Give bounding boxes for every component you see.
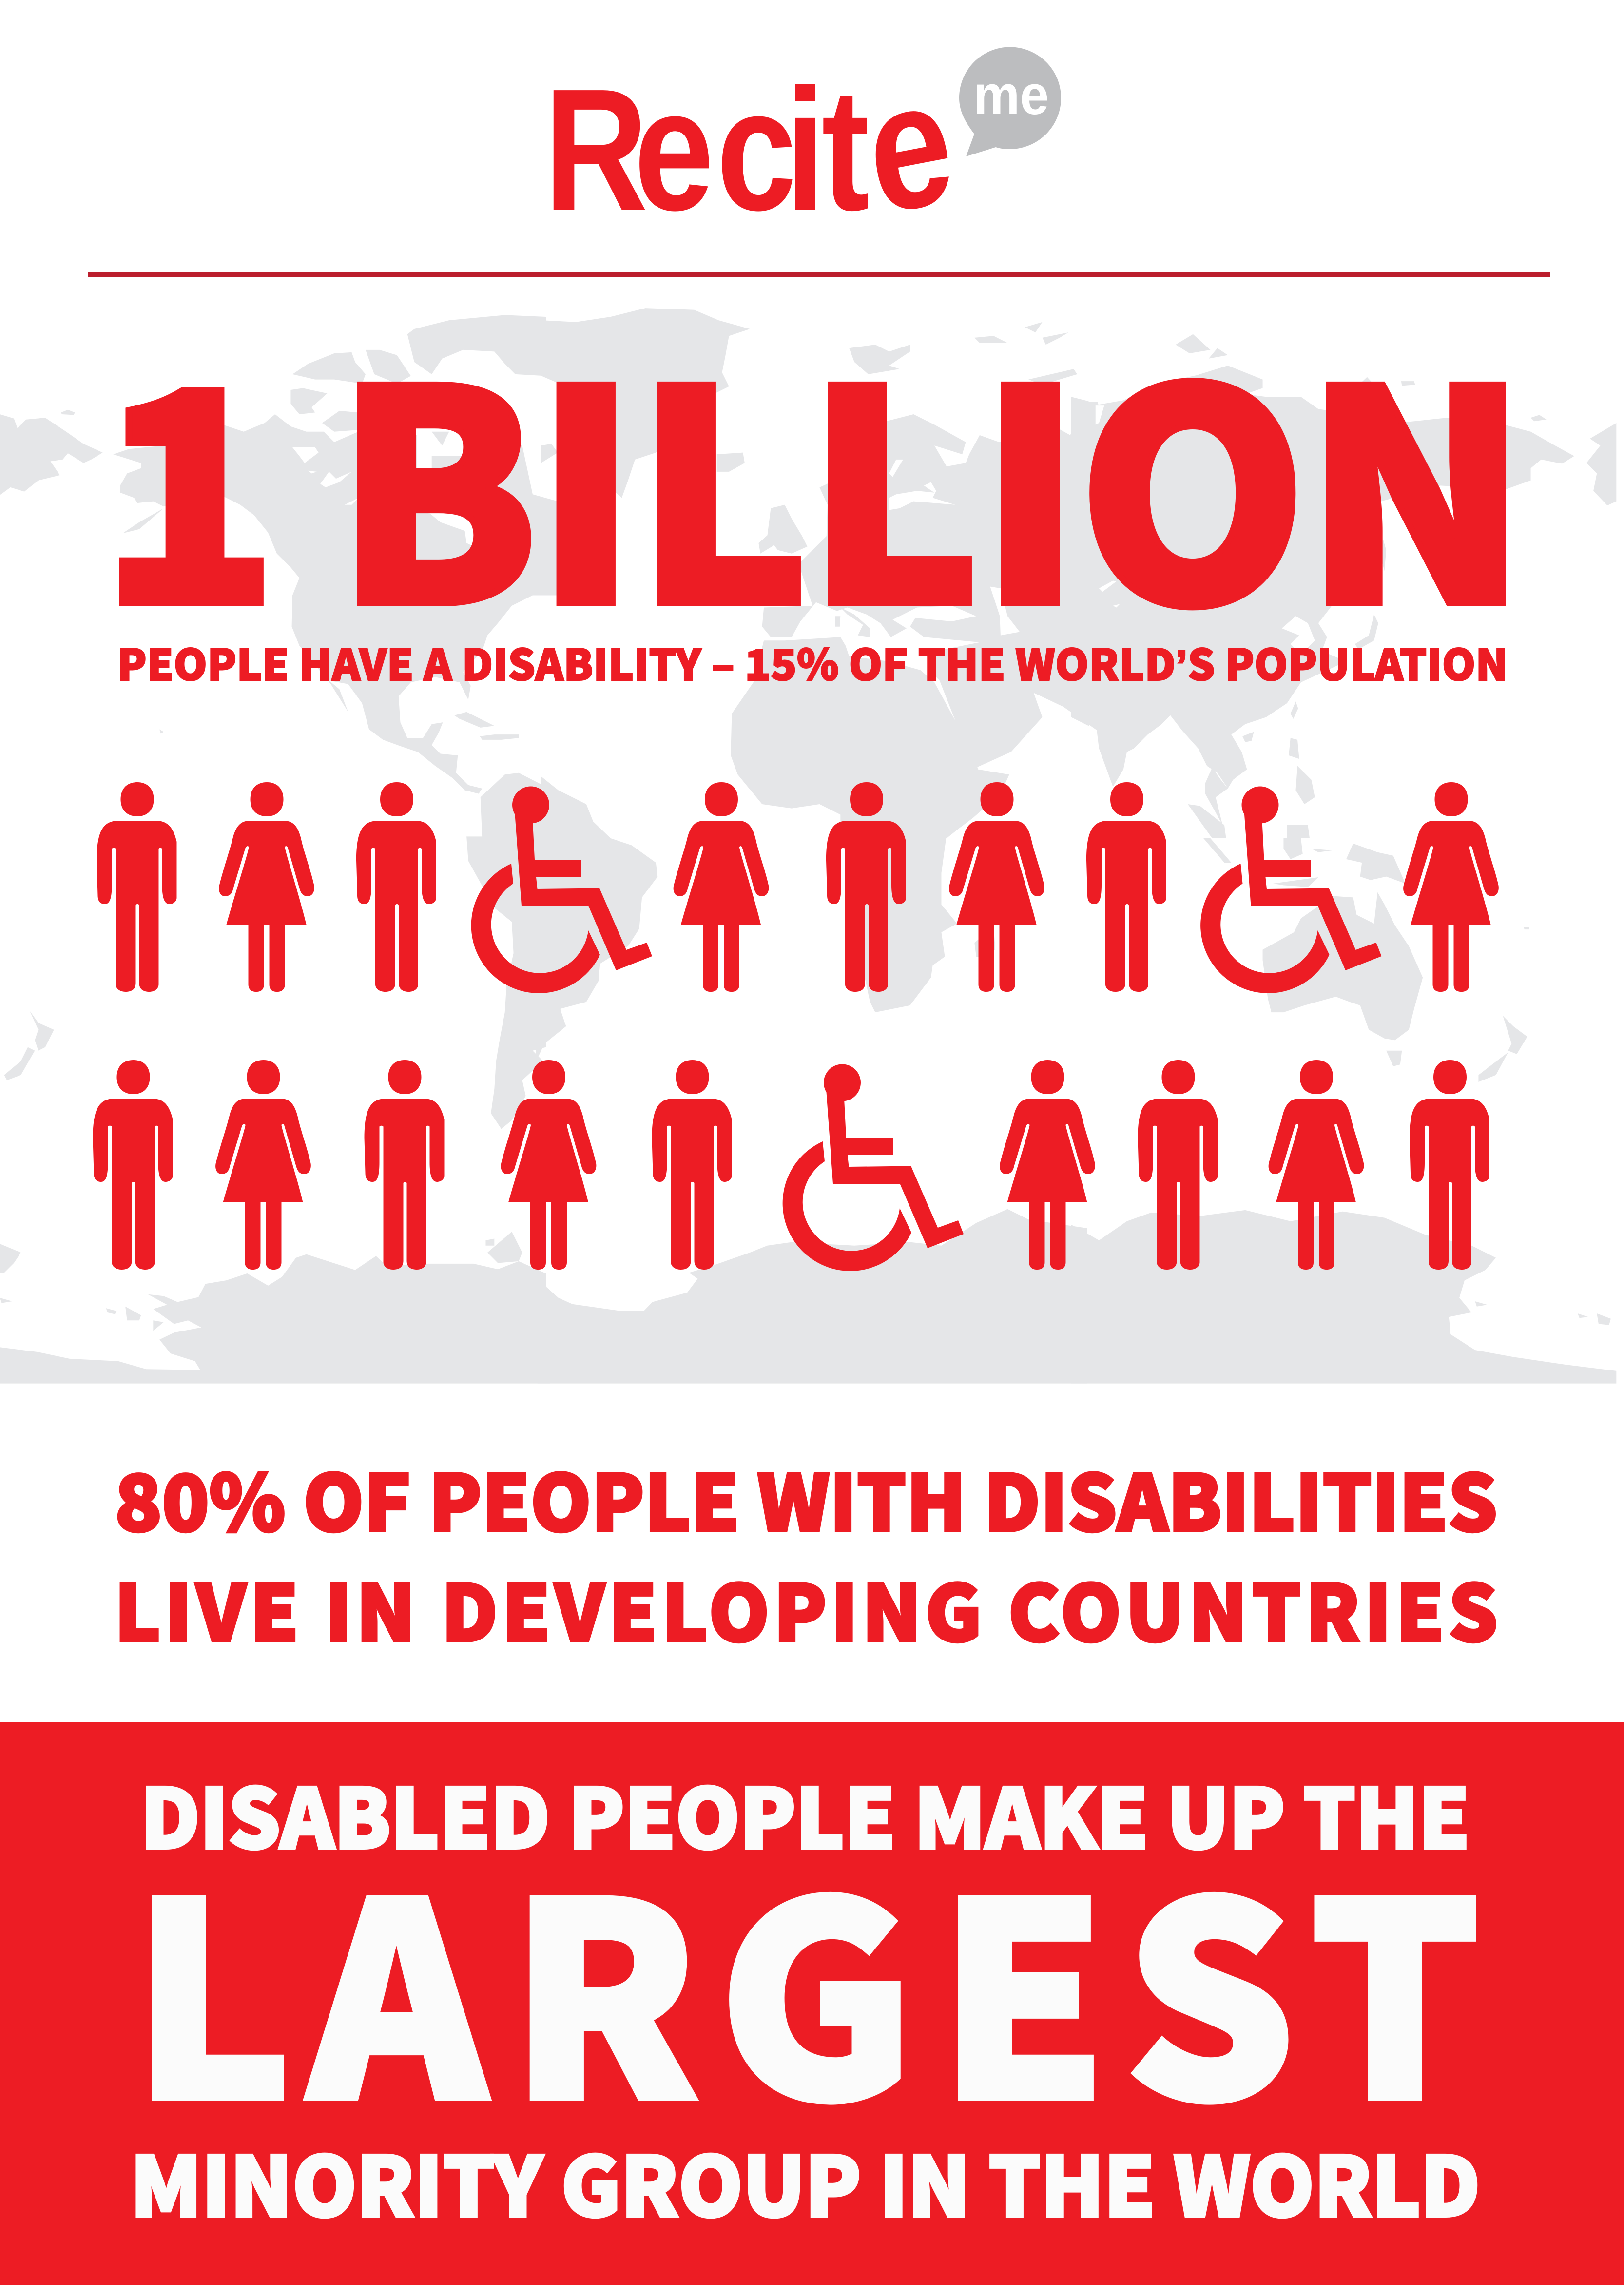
icon: woman xyxy=(219,782,314,992)
red band xyxy=(0,1722,1624,2285)
header rule xyxy=(88,272,1550,277)
speech bubble xyxy=(959,47,1061,156)
statistic line 1: 80% OF PEOPLE WITH DISABILITIES xyxy=(115,1442,1497,1553)
icon: woman xyxy=(1000,1060,1095,1270)
logo: Recite me xyxy=(544,40,1061,252)
map: north-east xyxy=(1071,334,1616,838)
icon: man xyxy=(365,1060,445,1270)
statistic line 2: LIVE IN DEVELOPING COUNTRIES xyxy=(115,1552,1498,1663)
icon: wheelchair xyxy=(1200,787,1381,993)
pictogram row 1 xyxy=(97,782,1499,993)
map: north-west xyxy=(0,315,558,838)
logo wordmark: e xyxy=(856,40,963,252)
band line 1: DISABLED PEOPLE MAKE UP THE xyxy=(140,1754,1470,1872)
icon: woman xyxy=(501,1060,596,1270)
band headline: LARGEST: LARGEST xyxy=(132,1788,1481,2176)
icon: man xyxy=(356,782,436,992)
map: south-centre xyxy=(536,835,1087,1384)
band line 3: MINORITY GROUP IN THE WORLD xyxy=(130,2122,1480,2240)
icon: man xyxy=(826,782,906,992)
icon: man xyxy=(652,1060,732,1270)
panel: largest minority xyxy=(0,1722,1624,2285)
subheading: PEOPLE HAVE A DISABILITY – 15% OF THE WORLD’S POPULATION xyxy=(117,632,1508,693)
icon: woman xyxy=(1269,1060,1364,1270)
icon: man xyxy=(1086,782,1166,992)
icon: wheelchair xyxy=(783,1064,964,1271)
icon: woman xyxy=(215,1060,311,1270)
icon: woman xyxy=(1403,782,1499,992)
statistic: developing countries xyxy=(115,1442,1498,1663)
logo wordmark: Recit xyxy=(544,53,870,247)
pictogram row 2 xyxy=(93,1060,1489,1271)
icon: man xyxy=(1138,1060,1218,1270)
icon: man xyxy=(97,782,176,992)
bubble text: me: me xyxy=(973,64,1049,126)
icon: man xyxy=(1410,1060,1489,1270)
icon: man xyxy=(93,1060,173,1270)
world map background xyxy=(0,308,1616,1384)
icon: woman xyxy=(674,782,769,992)
icon: woman xyxy=(949,782,1044,992)
map: south-west xyxy=(0,836,550,1384)
map: north-centre xyxy=(538,308,1098,838)
icon: wheelchair xyxy=(471,787,652,993)
map: south-east xyxy=(1071,838,1616,1384)
headline: 1 BILLION: 1 BILLION xyxy=(100,264,1527,687)
